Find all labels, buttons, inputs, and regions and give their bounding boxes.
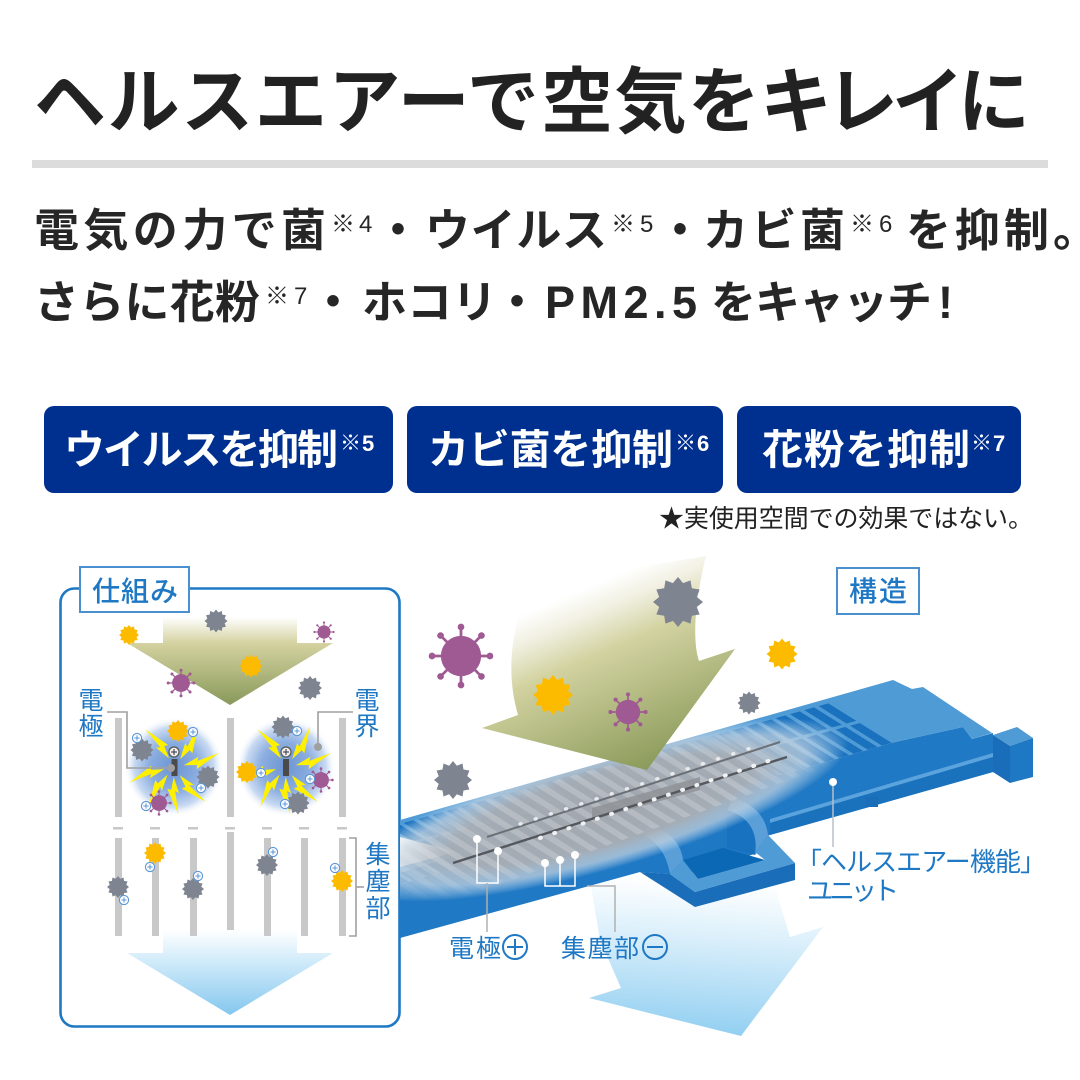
button: virus: ウイルスを抑制 <box>64 427 338 473</box>
intro text: さらに花粉 <box>34 277 260 328</box>
panel: mechanism <box>60 567 400 1026</box>
foot <box>640 835 795 907</box>
label: electrode: 電 <box>78 687 104 715</box>
airflow fade overlay <box>400 720 846 900</box>
label: collector: 集 <box>365 841 391 869</box>
intro text: ※ <box>331 211 355 238</box>
footnote: ★実使用空間での効果ではない。 <box>659 505 1033 533</box>
button: virus: ※ <box>340 432 361 455</box>
electric field left <box>124 717 224 817</box>
intro text: をキャッチ <box>711 277 932 328</box>
label: unit <box>796 847 1046 906</box>
unit body <box>400 680 1033 938</box>
button: mold: 6 <box>697 431 709 456</box>
intro text: 6 <box>879 211 892 238</box>
intro text: ・ <box>494 277 540 328</box>
intro text: 電気の力で菌 <box>34 205 326 256</box>
intro text: ウイルス <box>425 205 607 256</box>
electric field right <box>236 717 336 817</box>
central rail <box>453 742 787 863</box>
callout lines <box>473 778 837 932</box>
intro text: ! <box>938 277 953 328</box>
intro text: 7 <box>294 283 307 310</box>
dirty air arrow <box>127 617 333 705</box>
label: collector minus: 集塵部 <box>561 935 639 963</box>
intro text <box>34 205 1080 328</box>
intro text: ※ <box>265 283 289 310</box>
intro text: 4 <box>359 211 372 238</box>
button: mold: カビ菌を抑制 <box>428 427 673 473</box>
label: electrode <box>78 687 104 741</box>
structure label: 構造 <box>849 576 907 607</box>
label: unit: ユニット <box>807 876 899 906</box>
dirty air arrow <box>482 556 735 770</box>
label: collector: 部 <box>365 895 391 923</box>
label: unit: 「ヘルスエアー機能」 <box>796 847 1046 877</box>
intro text: カビ菌 <box>703 205 845 256</box>
intro text: ・ <box>376 205 421 256</box>
intro text: ※ <box>850 211 874 238</box>
title: 空気を <box>541 63 760 143</box>
title: キレイに <box>760 63 1030 143</box>
intro text: ホコリ <box>362 277 497 328</box>
intro text: ※ <box>611 211 635 238</box>
button: mold: ※ <box>675 432 696 455</box>
label: electrode: 極 <box>78 713 104 741</box>
button: pollen: 花粉を抑制 <box>762 427 970 473</box>
label: collector: 塵 <box>365 868 391 896</box>
label: collector <box>365 841 391 923</box>
leader lines <box>107 712 364 936</box>
label: electrode plus: 電極 <box>449 935 501 963</box>
clean air arrow <box>589 880 823 1036</box>
button: pollen <box>737 406 1021 493</box>
clean air arrow <box>127 930 333 1015</box>
arch walls <box>640 798 770 875</box>
structure label <box>837 568 919 614</box>
intro text: ・ <box>658 205 703 256</box>
particles <box>429 577 798 799</box>
panel label: 仕組み <box>92 576 178 607</box>
button: mold <box>407 406 723 493</box>
label: electrode plus <box>449 935 527 963</box>
button: virus: 5 <box>362 431 374 456</box>
intro text: 5 <box>640 211 653 238</box>
label: electric field <box>354 687 380 741</box>
title <box>34 63 1030 143</box>
label: electric field: 界 <box>354 713 380 741</box>
button: pollen: ※ <box>971 432 992 455</box>
button: pollen: 7 <box>993 431 1005 456</box>
structure diagram <box>400 556 1033 1036</box>
particles <box>107 610 353 905</box>
button: virus <box>44 406 393 493</box>
intro text: PM2.5 <box>545 277 697 328</box>
electrode bars <box>113 718 347 936</box>
panel label <box>80 567 189 612</box>
label: electric field: 電 <box>354 687 380 715</box>
title: ヘルスエアーで <box>34 63 539 143</box>
intro text: ・ <box>310 277 356 328</box>
